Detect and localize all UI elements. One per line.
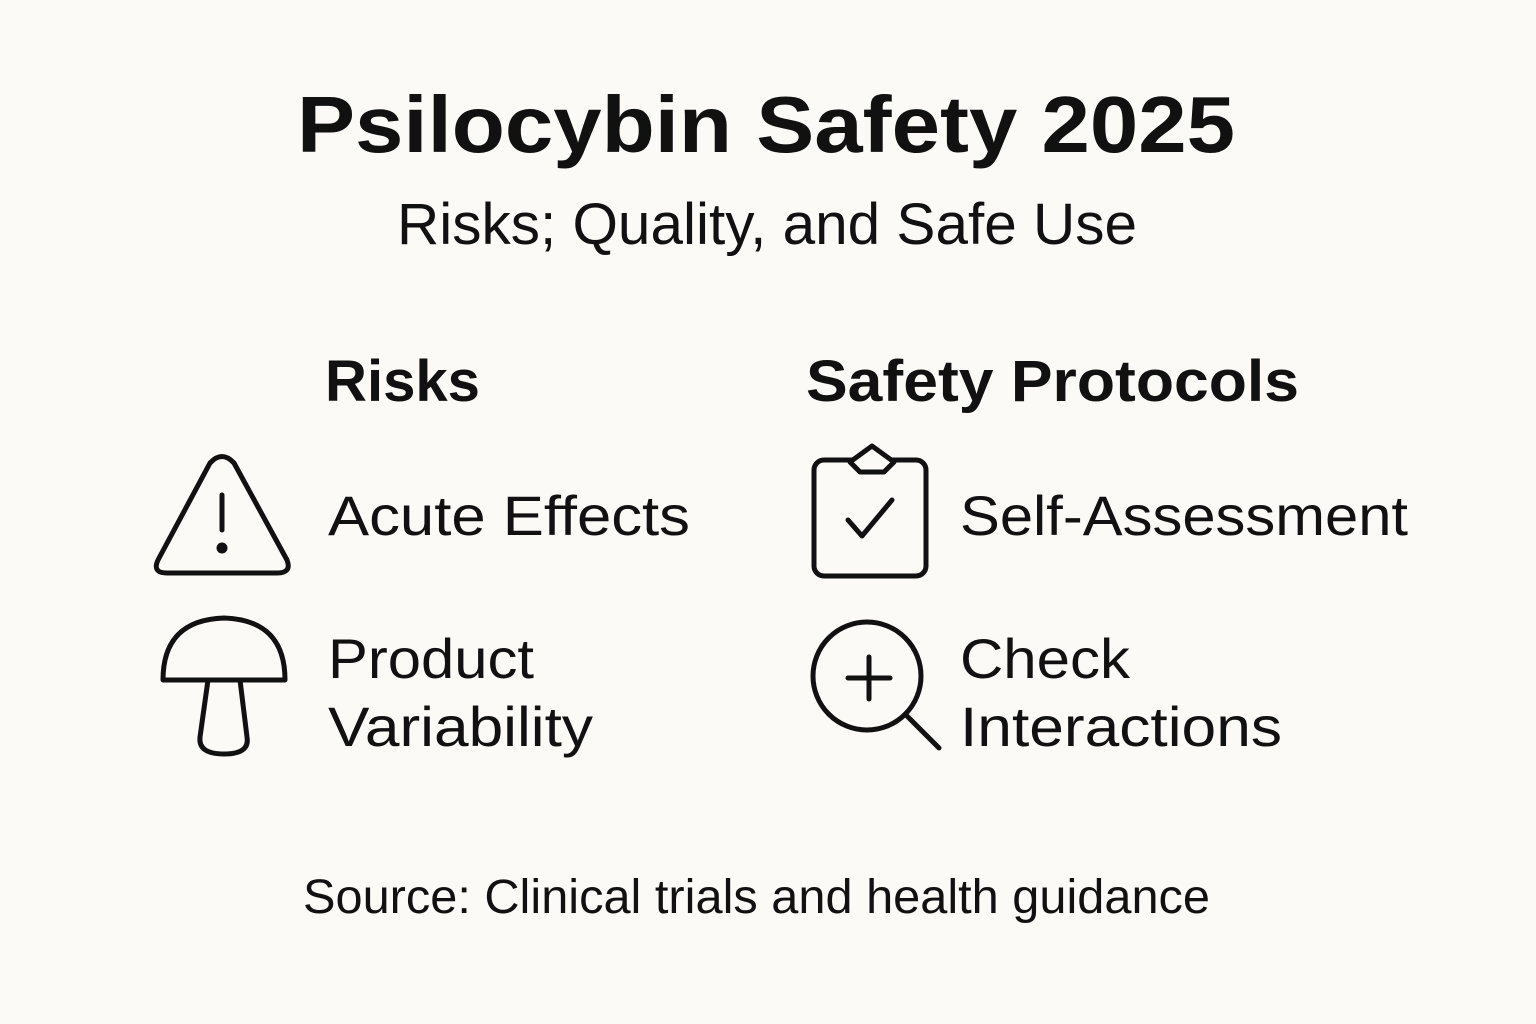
item: Product Variability: Product: [328, 627, 534, 690]
source note: Source: Clinical trials and health guidance: [303, 871, 1210, 924]
item: Check Interactions: Interactions: [960, 695, 1282, 758]
item: Self-Assessment: Self-Assessment: [960, 484, 1408, 547]
item: Product Variability: Variability: [328, 695, 593, 758]
item: Product Variability: [328, 627, 593, 758]
heading: Risks: Risks: [325, 349, 480, 414]
heading: Safety Protocols: Safety Protocols: [806, 349, 1299, 414]
item: Acute Effects: Acute Effects: [328, 484, 690, 547]
title: Psilocybin Safety 2025: [297, 80, 1235, 169]
subtitle: Risks; Quality, and Safe Use: [397, 192, 1137, 257]
icon: mushroom: [163, 618, 285, 754]
icon: warning triangle: [156, 456, 288, 573]
item: Check Interactions: [960, 627, 1282, 758]
item: Check Interactions: Check: [960, 627, 1131, 690]
icon: clipboard check: [814, 446, 926, 576]
icon: magnifier plus: [813, 622, 939, 748]
